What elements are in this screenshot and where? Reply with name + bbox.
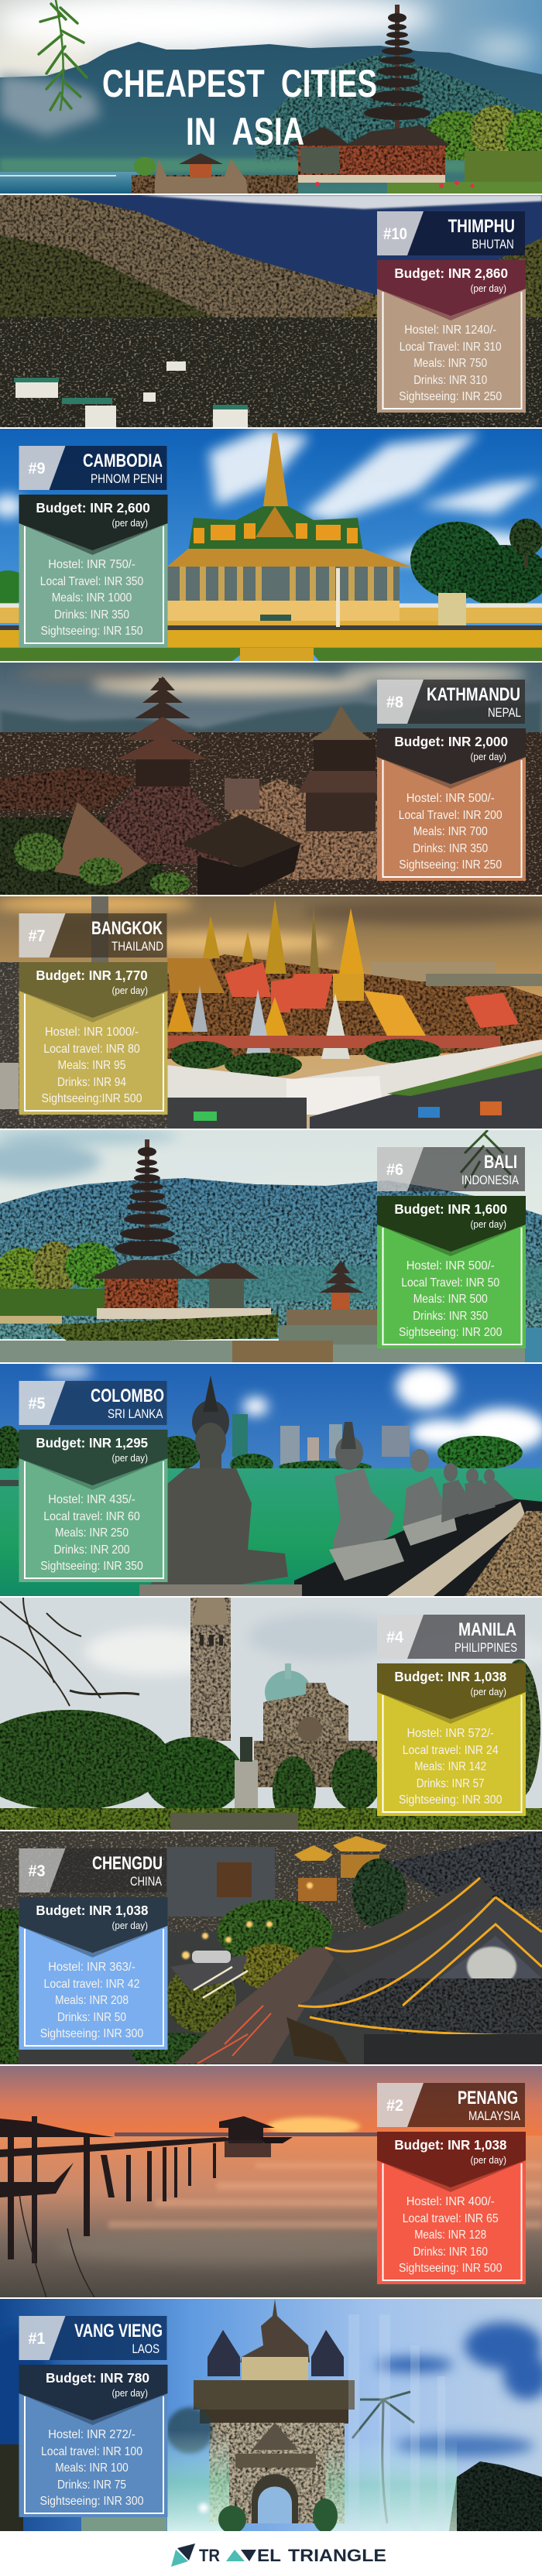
cost list: Hostel: INR 1000/- (45, 1026, 139, 1039)
budget box: (per day) (111, 2388, 148, 2399)
cost list: Hostel: INR 500/- (406, 792, 495, 805)
photo: pier at sunset (0, 2066, 542, 2297)
cost list: Local travel: INR 100 (41, 2445, 142, 2458)
budget box (377, 1196, 526, 1348)
title: IN ASIA (186, 110, 304, 153)
cost list: Meals: INR 1000 (52, 591, 132, 605)
budget box (377, 260, 526, 413)
budget box: Budget: INR 1,038 (394, 1669, 506, 1684)
cost list: Hostel: INR 1240/- (404, 324, 496, 337)
cost list: Drinks: INR 200 (54, 1543, 130, 1557)
name tab: THIMPHU (448, 216, 515, 237)
photo: Ulun Danu temple (0, 1130, 542, 1362)
budget box: (per day) (111, 1453, 148, 1464)
photo: Patuxai monument with fountains (0, 2299, 542, 2531)
name tab: COLOMBO (91, 1386, 164, 1406)
budget box: Budget: INR 1,295 (36, 1435, 148, 1451)
cost list: Drinks: INR 75 (57, 2478, 126, 2492)
name tab: PHILIPPINES (455, 1640, 517, 1655)
cost list: Hostel: INR 572/- (406, 1727, 494, 1740)
name tab: SRI LANKA (108, 1406, 163, 1421)
cost list: Local travel: INR 80 (43, 1043, 140, 1056)
cost list: Sightseeing: INR 350 (40, 1560, 143, 1573)
budget box: (per day) (471, 752, 506, 762)
cost list: Hostel: INR 363/- (48, 1961, 136, 1974)
name tab: #6 (386, 1161, 403, 1179)
name tab: CHENGDU (92, 1853, 163, 1874)
name tab: PHNOM PENH (91, 471, 163, 486)
cost list (399, 792, 503, 872)
photo: Manila Cathedral (0, 1598, 542, 1830)
header photo: Bali lake temple (0, 0, 542, 194)
footer logo: Travel Triangle (171, 2543, 386, 2567)
cost list: Drinks: INR 350 (54, 608, 129, 622)
panel: #6 Bali (0, 1129, 542, 1362)
cost list: Hostel: INR 400/- (406, 2195, 495, 2208)
title (102, 62, 377, 153)
cost list: Drinks: INR 57 (417, 1777, 485, 1790)
name tab: #7 (28, 927, 45, 945)
panel: #5 Colombo (0, 1364, 542, 1596)
budget box (19, 1430, 167, 1582)
cost list: Sightseeing: INR 250 (399, 390, 502, 403)
header panel: cheapest cities in Asia (0, 0, 542, 194)
budget box (19, 2365, 167, 2517)
budget box (377, 728, 526, 881)
footer logo: Travel Triangle: TR (199, 2546, 220, 2565)
name tab: BANGKOK (91, 918, 163, 939)
bamboo (39, 0, 87, 110)
cost list: Meals: INR 250 (55, 1526, 129, 1540)
name tab (19, 446, 167, 490)
photo: Thimphu valley (0, 195, 542, 427)
name tab: VANG VIENG (74, 2321, 163, 2341)
cost list: Sightseeing: INR 250 (399, 858, 502, 872)
cost list: Meals: INR 500 (413, 1293, 488, 1306)
name tab: NEPAL (488, 705, 521, 720)
name tab: #3 (28, 1862, 45, 1880)
cost list: Local travel: INR 42 (43, 1978, 140, 1991)
name tab: INDONESIA (461, 1173, 520, 1187)
cost list: Sightseeing: INR 500 (399, 2262, 503, 2275)
budget box (377, 1663, 526, 1816)
cost list: Local travel: INR 24 (403, 1744, 499, 1757)
cost list: Drinks: INR 310 (413, 374, 487, 387)
budget box: Budget: INR 1,038 (394, 2137, 507, 2153)
cost list: Hostel: INR 272/- (48, 2428, 136, 2441)
name tab (19, 913, 167, 957)
budget box: (per day) (471, 1219, 506, 1230)
cost list (42, 1026, 142, 1105)
card: Vang Vieng (19, 2316, 167, 2517)
cost list: Drinks: INR 50 (57, 2011, 126, 2024)
budget box: Budget: INR 1,600 (394, 1201, 507, 1217)
name tab: BHUTAN (472, 237, 514, 252)
budget box (19, 495, 167, 647)
card: Bangkok (19, 913, 167, 1115)
cost list: Sightseeing: INR 200 (399, 1326, 503, 1339)
card: Penang (377, 2083, 526, 2284)
card: Colombo (19, 1381, 167, 1582)
name tab: #8 (386, 694, 403, 711)
photo: Seema Malaka Buddhas (0, 1364, 542, 1596)
cost list: Drinks: INR 350 (413, 1310, 488, 1323)
budget box: Budget: INR 1,038 (36, 1903, 149, 1918)
cost list: Drinks: INR 160 (413, 2245, 488, 2259)
name tab: #4 (386, 1629, 403, 1646)
name tab: MANILA (458, 1619, 516, 1640)
cost list: Hostel: INR 435/- (48, 1493, 136, 1506)
name tab: BALI (484, 1152, 517, 1173)
cost list: Local Travel: INR 200 (399, 809, 503, 822)
pagoda (364, 5, 431, 128)
name tab: MALAYSIA (468, 2108, 521, 2123)
cost list: Meals: INR 700 (413, 825, 488, 838)
cost list: Local Travel: INR 50 (401, 1276, 499, 1290)
name tab: LAOS (132, 2341, 160, 2356)
panel: #9 Cambodia (0, 429, 542, 661)
budget box: (per day) (111, 985, 148, 996)
panel: #3 Chengdu (0, 1831, 542, 2071)
photo: Chengdu old town (0, 1831, 542, 2064)
name tab (377, 211, 525, 255)
title: CHEAPEST CITIES (102, 62, 377, 105)
panel: #4 Manila (0, 1598, 542, 1830)
footer logo: Travel Triangle: TRIANGLE (288, 2546, 386, 2565)
budget box: Budget: INR 780 (46, 2370, 149, 2386)
cost list (399, 324, 502, 403)
cost list: Sightseeing:INR 500 (42, 1092, 142, 1105)
budget box: (per day) (111, 518, 148, 529)
budget box: Budget: INR 1,770 (36, 968, 148, 983)
panel: #2 Penang (0, 2066, 542, 2297)
budget box: Budget: INR 2,600 (36, 500, 150, 516)
name tab (19, 1381, 167, 1425)
name tab: CAMBODIA (83, 450, 163, 471)
cost list: Hostel: INR 750/- (48, 558, 136, 571)
cost list (40, 2428, 144, 2508)
name tab: #9 (28, 460, 45, 478)
card: Chengdu (19, 1848, 167, 2050)
name tab: #10 (383, 225, 407, 243)
cost list (399, 1259, 503, 1339)
card: Thimphu (377, 211, 526, 413)
cost list (40, 1961, 143, 2040)
name tab: #2 (386, 2097, 403, 2115)
cost list: Local Travel: INR 350 (40, 575, 143, 588)
name tab: PENANG (458, 2088, 518, 2108)
name tab (377, 2083, 525, 2127)
budget box: (per day) (471, 2155, 506, 2166)
card: Manila (377, 1615, 526, 1816)
name tab (19, 1848, 167, 1893)
budget box: Budget: INR 2,860 (394, 265, 508, 281)
budget box: (per day) (111, 1920, 148, 1931)
cost list (40, 558, 143, 638)
cost list: Local travel: INR 60 (43, 1510, 140, 1523)
name tab: CHINA (130, 1874, 163, 1889)
cost list: Sightseeing: INR 300 (40, 2495, 144, 2508)
name tab: #1 (28, 2330, 46, 2348)
cost list: Meals: INR 142 (414, 1760, 486, 1773)
budget box: (per day) (471, 1687, 506, 1697)
cost list: Sightseeing: INR 150 (40, 625, 143, 638)
panel: #10 Thimphu (0, 195, 542, 427)
name tab: #5 (28, 1395, 46, 1413)
cost list: Drinks: INR 94 (57, 1076, 126, 1089)
cost list: Local Travel: INR 310 (400, 341, 502, 354)
cost list: Drinks: INR 350 (413, 842, 488, 855)
cost list: Local travel: INR 65 (403, 2212, 499, 2225)
photo: Bhaktapur temples (0, 663, 542, 895)
photo: Grand Palace (0, 896, 542, 1129)
cost list: Meals: INR 208 (55, 1994, 129, 2007)
footer logo: Travel Triangle: EL (257, 2546, 281, 2565)
name tab (377, 1147, 525, 1191)
name tab (377, 680, 525, 724)
cost list: Meals: INR 128 (414, 2228, 486, 2242)
trees (426, 105, 542, 166)
budget box (19, 1897, 167, 2050)
photo: Royal Palace Phnom Penh (0, 429, 542, 661)
panel: #8 Kathmandu (0, 663, 542, 895)
cost list: Sightseeing: INR 300 (40, 2027, 143, 2040)
cost list (399, 2195, 503, 2275)
budget box (19, 962, 167, 1115)
cost list: Meals: INR 100 (55, 2461, 129, 2475)
budget box: (per day) (471, 283, 506, 294)
card: Bali (377, 1147, 526, 1348)
name tab: THAILAND (111, 939, 163, 954)
panel: #7 Bangkok (0, 895, 542, 1129)
cost list: Sightseeing: INR 300 (399, 1793, 503, 1807)
cost list (40, 1493, 143, 1573)
name tab (377, 1615, 525, 1659)
panel: #1 Vang Vieng (0, 2299, 542, 2533)
budget box: Budget: INR 2,000 (394, 734, 508, 749)
cost list: Meals: INR 750 (413, 357, 487, 370)
cost list: Meals: INR 95 (57, 1059, 126, 1072)
card: Kathmandu (377, 680, 526, 881)
name tab (19, 2316, 167, 2360)
cost list: Hostel: INR 500/- (406, 1259, 495, 1273)
budget box (377, 2132, 526, 2284)
cost list (399, 1727, 503, 1807)
card: Cambodia (19, 446, 167, 647)
